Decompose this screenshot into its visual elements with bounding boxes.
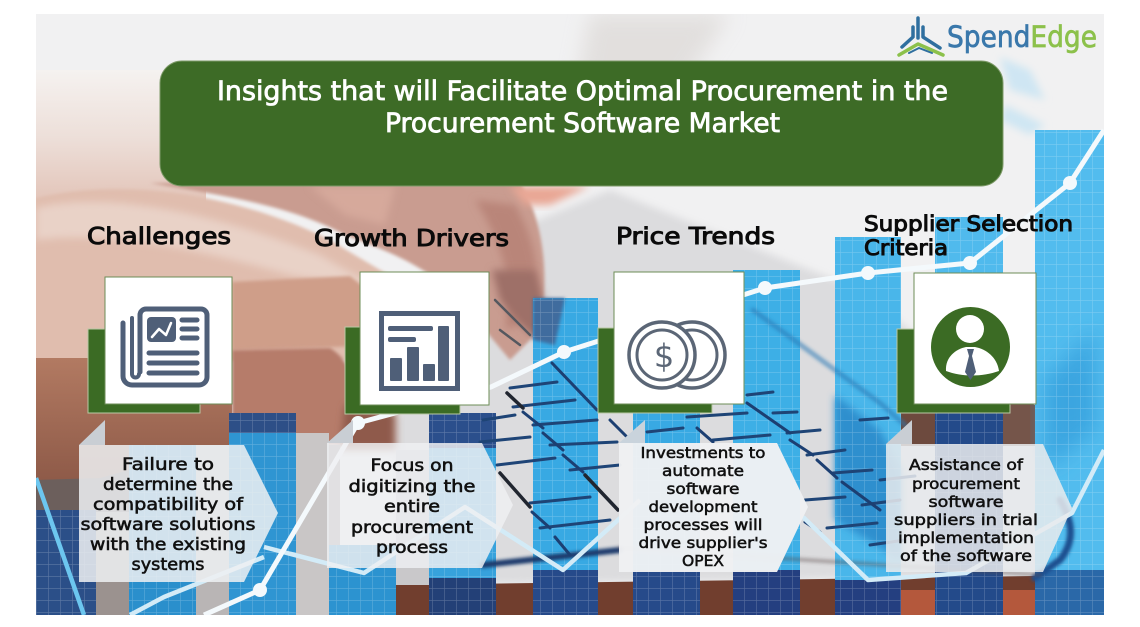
logo text: SpendEdge — [947, 20, 1097, 54]
callout: Supplier Selection Criteria — [886, 420, 1072, 572]
icon: newspaper — [123, 309, 207, 385]
title text — [217, 76, 948, 139]
trend line behind — [36, 450, 1104, 615]
icon: person with tie — [931, 307, 1010, 387]
card: Growth Drivers icon — [345, 272, 489, 414]
callout text: procurement — [351, 518, 473, 538]
callout text: Assistance of — [909, 456, 1024, 474]
icon: bar chart report — [379, 311, 460, 391]
icon: coins — [629, 322, 725, 388]
table under laptop — [396, 576, 1035, 615]
callout text: drive supplier's — [638, 534, 768, 552]
heading: Supplier Selection Criteria — [864, 212, 1073, 260]
icon: coins: $ — [654, 337, 674, 375]
callout text: compatibility of — [93, 495, 244, 515]
title text: Insights that will Facilitate Optimal Procurement in the — [217, 76, 948, 107]
callout text: OPEX — [682, 552, 724, 570]
fingertip over keys — [492, 270, 552, 335]
table left — [96, 445, 340, 615]
card: Price Trends icon — [598, 272, 744, 413]
callout text: software — [666, 480, 740, 498]
callout text: software solutions — [80, 515, 256, 535]
callout text: Focus on — [370, 456, 454, 476]
grid overlay on bars — [36, 130, 1104, 615]
logo: SpendEdge — [899, 18, 1097, 55]
heading: Growth Drivers: Growth Drivers — [314, 226, 509, 252]
laptop body — [398, 190, 1035, 584]
bars — [36, 130, 1104, 615]
callout text: process — [376, 538, 448, 558]
callout text: with the existing — [90, 535, 246, 555]
callout text: digitizing the — [348, 477, 476, 497]
callout text: Failure to — [122, 455, 214, 475]
heading: Supplier Selection Criteria: Supplier Selection — [864, 212, 1073, 236]
callout text: implementation — [898, 529, 1034, 547]
callout text — [80, 455, 256, 575]
callout text: processes will — [644, 516, 762, 534]
callout text: automate — [662, 462, 744, 480]
icon: logo mark — [899, 18, 943, 55]
title banner — [160, 61, 1003, 186]
callout text: entire — [384, 497, 440, 517]
heading: Supplier Selection Criteria: Criteria — [864, 236, 948, 260]
callout text: procurement — [912, 475, 1020, 493]
heading: Challenges: Challenges — [87, 224, 231, 250]
callout text: suppliers in trial — [894, 511, 1038, 529]
callout text: Investments to — [640, 444, 766, 462]
callout text — [894, 456, 1038, 565]
callout text: determine the — [103, 475, 233, 495]
heading: Price Trends: Price Trends — [616, 224, 775, 250]
upper fingers — [150, 183, 544, 360]
callout text: software — [928, 493, 1004, 511]
card: Challenges icon — [88, 277, 232, 413]
callout: Challenges — [79, 420, 278, 582]
callout: Price Trends — [619, 420, 808, 572]
laptop edge shading — [483, 310, 1071, 578]
callout text — [348, 456, 476, 558]
callout text: of the software — [900, 547, 1032, 565]
white trend line — [204, 130, 1104, 615]
card: Supplier Selection Criteria icon — [897, 273, 1036, 413]
lower fingers — [232, 274, 360, 350]
callout: Growth Drivers — [327, 420, 513, 568]
callout text: systems — [132, 555, 205, 575]
keyboard keys — [480, 300, 915, 555]
callout text — [638, 444, 768, 570]
hand back — [36, 189, 386, 362]
callout text: development — [648, 498, 758, 516]
title text: Procurement Software Market — [385, 108, 780, 139]
